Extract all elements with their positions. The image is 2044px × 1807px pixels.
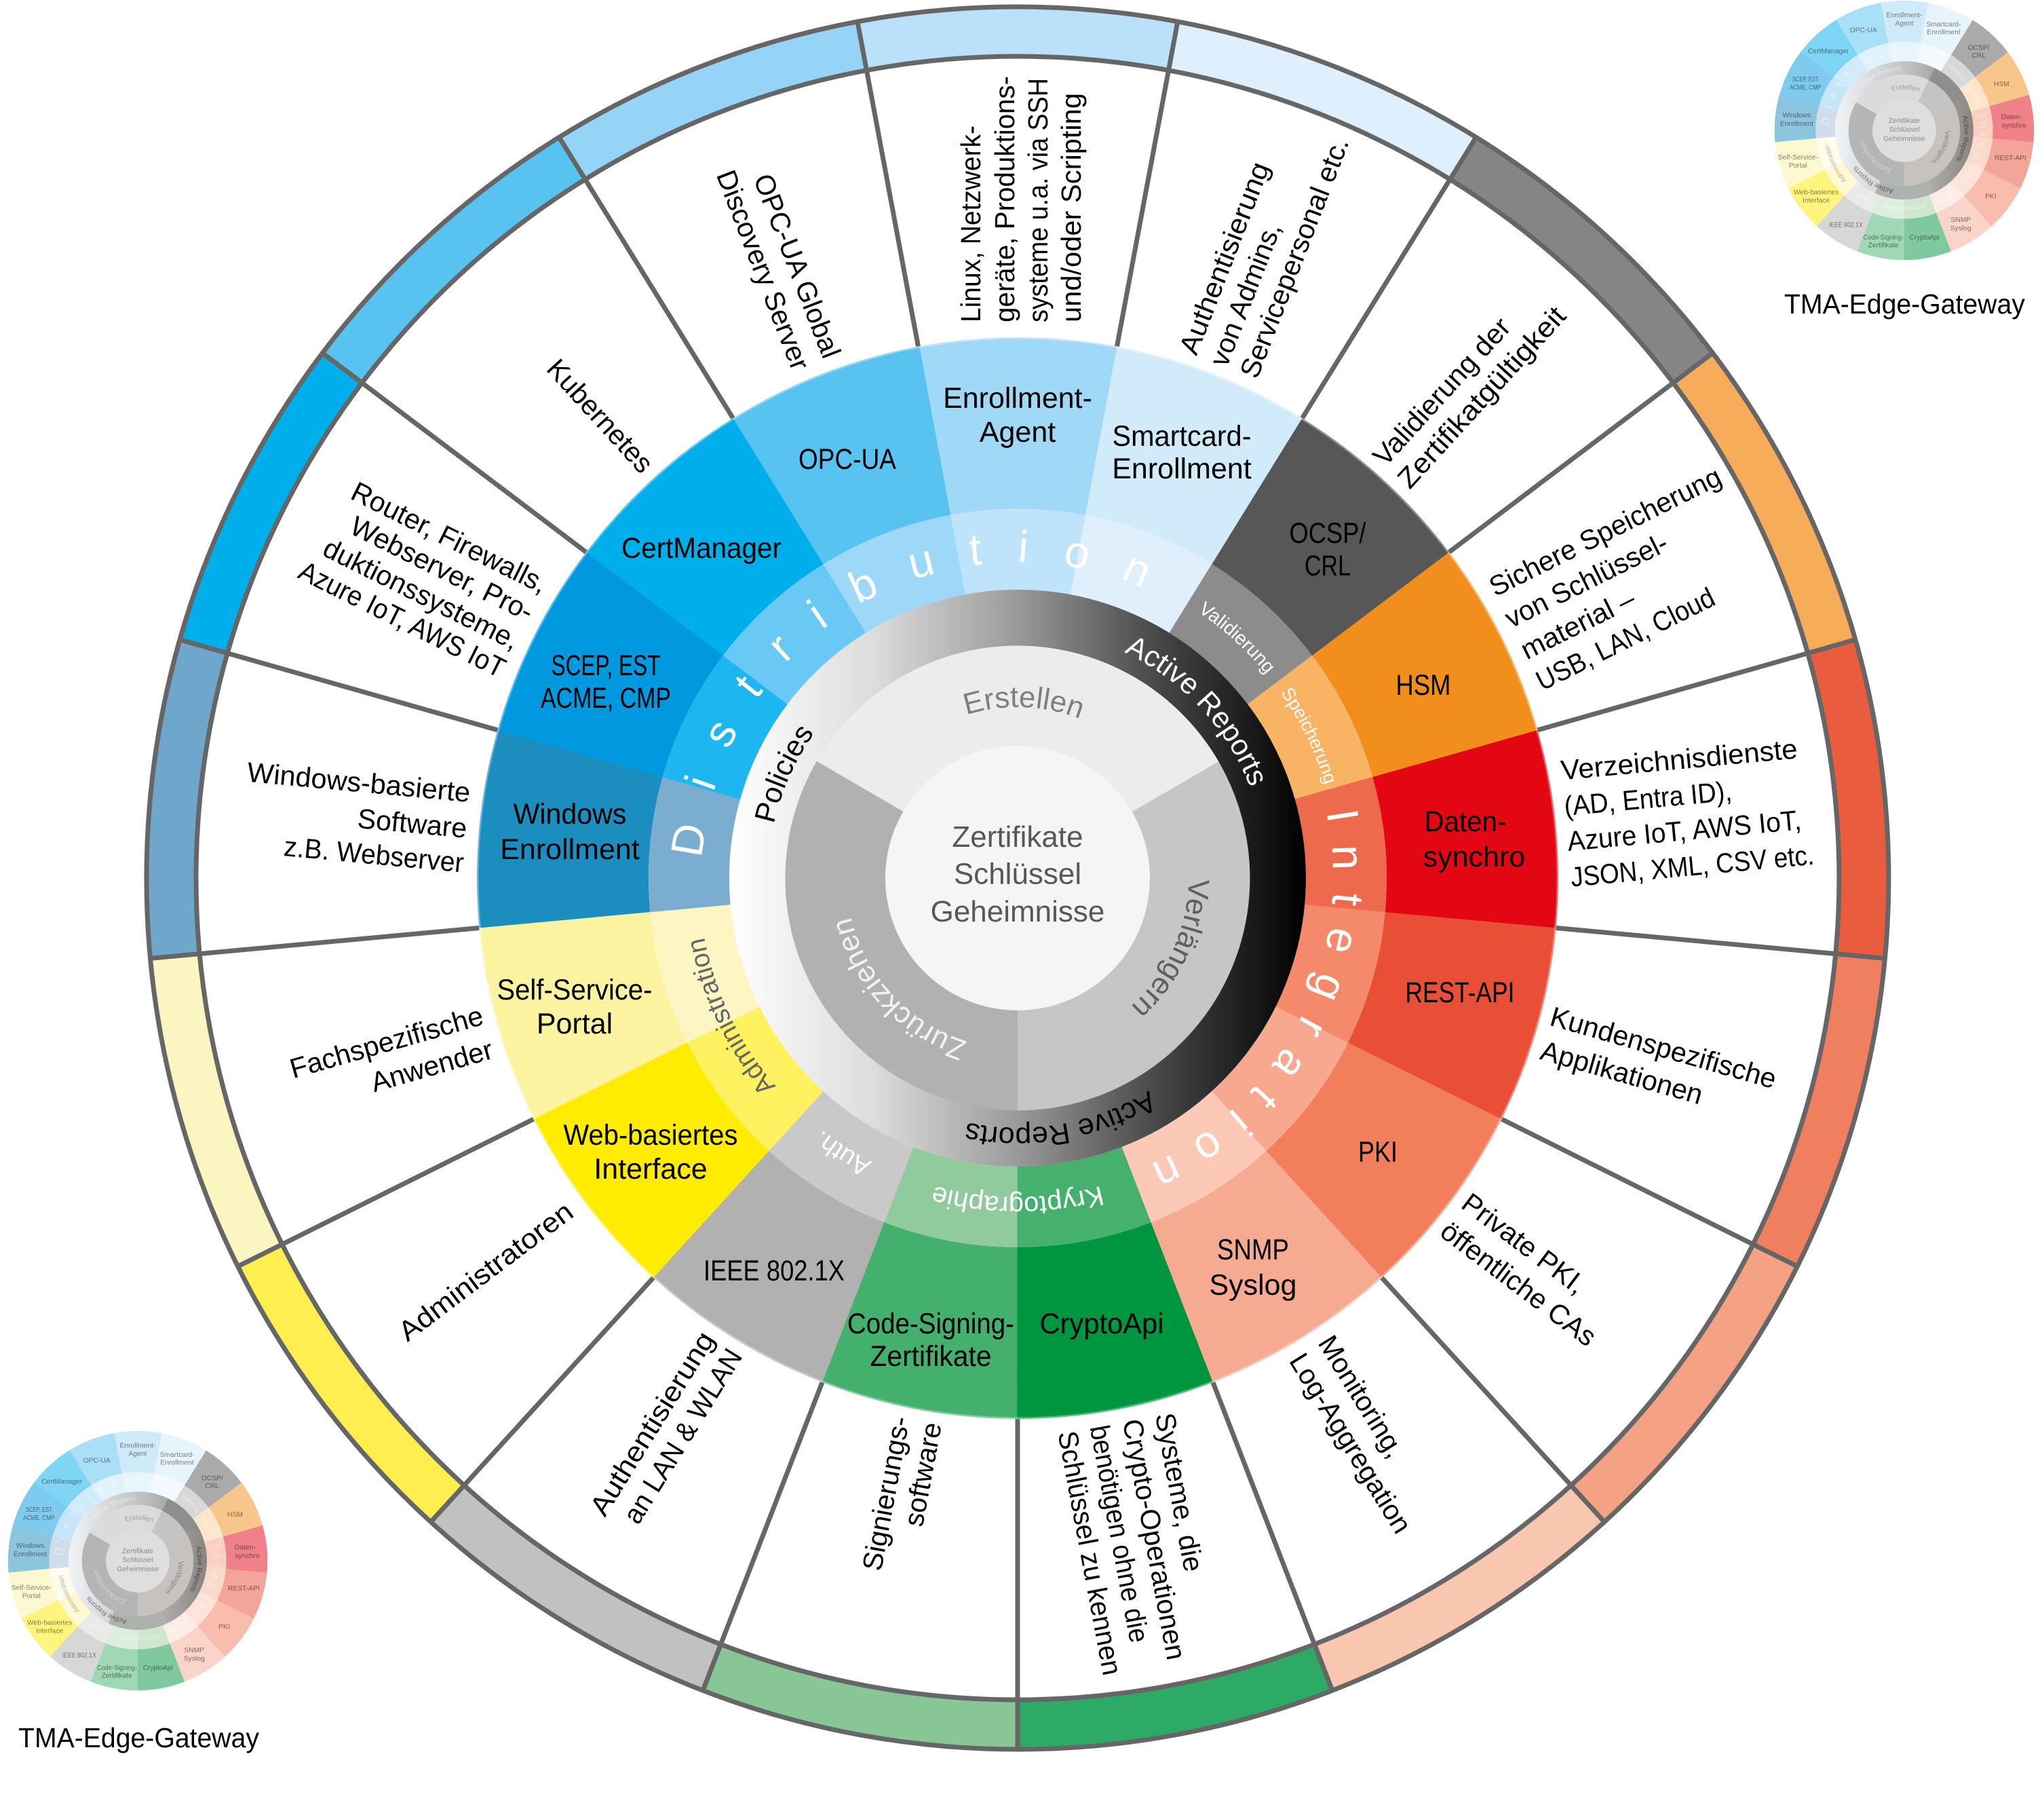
mini labels: Validierung: [182, 1494, 199, 1512]
description: Windows Enrollment: Software: [356, 803, 468, 844]
SNMP Syslog: Syslog: [1209, 1269, 1297, 1301]
mini labels: Active Reports: [1853, 166, 1894, 194]
mini labels: Active Reports: [87, 1596, 128, 1624]
centre text: Zertifikate: [952, 820, 1083, 854]
mini labels: Administration: [60, 1576, 80, 1612]
segment labels: [497, 382, 1525, 1373]
mini labels: Distribution: [1821, 47, 1919, 125]
mini labels: Active Reports: [1859, 66, 1902, 88]
SCEP, EST ACME, CMP: ACME, CMP: [541, 682, 671, 715]
mini labels: Interface: [36, 1627, 63, 1635]
ring: category band: [689, 550, 1346, 1206]
description: PKI: öffentliche CAs: [1435, 1215, 1602, 1352]
description: Windows Enrollment: z.B. Webserver: [283, 831, 465, 879]
mini labels: PKI: [218, 1623, 230, 1631]
SNMP Syslog: SNMP: [1217, 1234, 1289, 1266]
description: Datensynchro: Verzeichnisdienste: [1560, 733, 1798, 786]
description: SNMP: Monitoring,: [1312, 1330, 1411, 1463]
mini labels: SCEP, EST: [1792, 76, 1819, 83]
PKI: PKI: [1358, 1136, 1397, 1168]
ring: technology segments: [478, 338, 1558, 1418]
mini labels: SNMP: [1950, 216, 1971, 224]
description: SCEP: duktionssysteme,: [318, 532, 524, 656]
label: Validierung: Validierung: [1202, 601, 1274, 674]
Windows Enrollment: Windows: [513, 798, 627, 831]
Datensynchro: Daten-: [1425, 805, 1506, 838]
caption: bottom left mini wheel: TMA-Edge-Gateway: [18, 1722, 259, 1753]
mini labels: Distribution: [54, 1477, 153, 1555]
ring: lifecycle sectors: [836, 696, 1199, 1060]
CertManager: CertManager: [621, 532, 782, 565]
label: Policies: Policies: [754, 727, 813, 822]
description: SNMP: Log-Aggregation: [1284, 1348, 1418, 1539]
outer descriptions, left half: [239, 153, 948, 1579]
OCSP/CRL: CRL: [1305, 550, 1351, 582]
mini labels: CryptoApi: [1910, 234, 1940, 242]
mini labels: Administration: [1826, 145, 1847, 182]
description: SCEP: Azure IoT, AWS IoT: [294, 555, 511, 684]
mini labels: Enrollment-: [1887, 12, 1922, 20]
description: OCSP: Zertifikatgültigkeit: [1391, 300, 1573, 494]
mini labels: Enrollment-: [120, 1443, 155, 1450]
mini labels: HSM: [1994, 81, 2009, 88]
mini labels: Verlängern: [1932, 131, 1950, 163]
mini labels: Self-Service-: [1778, 154, 1818, 161]
mini labels: [1778, 12, 2026, 250]
mini labels: Enrollment: [14, 1551, 47, 1558]
mini labels: Smartcard-: [160, 1451, 195, 1459]
mini labels: [12, 1443, 260, 1680]
description: Datensynchro: Azure IoT, AWS IoT,: [1566, 804, 1802, 857]
mini labels: synchro: [2001, 122, 2026, 130]
SCEP, EST ACME, CMP: SCEP, EST: [551, 649, 661, 682]
mini labels: IEEE 802.1X: [62, 1652, 96, 1659]
caption: top right mini wheel: TMA-Edge-Gateway: [1784, 288, 2025, 320]
mini labels: Active Reports: [1956, 115, 1969, 161]
mini labels: Active Reports: [190, 1546, 203, 1592]
mini labels: Daten-: [235, 1544, 256, 1551]
mini labels: PKI: [1985, 193, 1997, 200]
mini labels: Interface: [1802, 197, 1830, 204]
Code-Signing-Zertifikate: Code-Signing-: [847, 1308, 1014, 1340]
outer descriptions, right half: [955, 76, 1815, 1677]
mini labels: Kryptographie: [117, 1635, 159, 1641]
Windows Enrollment: Enrollment: [500, 833, 640, 866]
mini labels: CertManager: [41, 1479, 83, 1486]
mini labels: Self-Service-: [12, 1584, 52, 1592]
mini labels: CRL: [205, 1483, 219, 1490]
description: Code-Signing: software: [898, 1420, 948, 1529]
mini labels: Web-basiertes: [27, 1619, 72, 1627]
mini labels: Integration: [1937, 114, 1987, 204]
mini labels: ACME, CMP: [23, 1515, 54, 1522]
description: Smartcard-Enrollment: Servicepersonal etc.: [1234, 133, 1355, 382]
Enrollment-Agent: Enrollment-: [943, 382, 1092, 415]
mini labels: IEEE 802.1X: [1829, 221, 1863, 229]
mini labels: Zertifikate: [122, 1547, 153, 1555]
mini labels: Code-Signing-: [97, 1665, 137, 1672]
ring: active reports gradient: [757, 617, 1278, 1139]
OCSP/CRL: OCSP/: [1289, 517, 1366, 550]
mini labels: Auth.: [91, 1622, 102, 1631]
mini wheel: bottom left: [12, 1443, 260, 1680]
Web-basiertes Interface: Interface: [594, 1153, 708, 1185]
mini labels: Active Reports: [93, 1497, 135, 1519]
Enrollment-Agent: Agent: [980, 416, 1056, 449]
mini labels: Verlängern: [162, 1558, 189, 1598]
description: REST-API: Kundenspezifische: [1547, 1001, 1780, 1095]
description: CryptoApi: Schlüssel zu kennen: [1052, 1428, 1128, 1677]
description: CryptoApi: Systeme, die: [1149, 1410, 1210, 1574]
description: OPC-UA: OPC-UA Global: [748, 170, 847, 362]
description: Enrollment-Agent: Linux, Netzwerk-: [955, 126, 986, 322]
description: REST-API: Applikationen: [1537, 1035, 1706, 1110]
label: Integration: Integration: [1153, 812, 1362, 1183]
centre circle: [885, 746, 1150, 1010]
label: Auth.: Auth.: [822, 1131, 872, 1174]
description: IEEE: Authentisierung: [583, 1326, 720, 1521]
description: Enrollment-Agent: systeme u.a. via SSH: [1022, 78, 1054, 322]
description: Self-Service: Anwender: [367, 1033, 497, 1098]
description: SCEP: Webserver, Pro-: [345, 510, 539, 627]
description: Windows Enrollment: Windows-basierte: [246, 757, 471, 808]
Datensynchro: synchro: [1423, 841, 1525, 873]
mini labels: ACME, CMP: [1790, 84, 1821, 92]
mini labels: SCEP, EST: [26, 1506, 52, 1514]
mini labels: Windows: [16, 1542, 45, 1550]
ring: outer colour band: [171, 31, 1864, 1725]
description: Enrollment-Agent: und/oder Scripting: [1056, 93, 1087, 322]
Smartcard-Enrollment: Enrollment: [1112, 453, 1252, 485]
description: Smartcard-Enrollment: von Admins,: [1203, 218, 1287, 370]
mini labels: Schlüssel: [122, 1556, 153, 1564]
label: Kryptographie: Kryptographie: [933, 1186, 1103, 1213]
description: IEEE: an LAN & WLAN: [617, 1343, 748, 1529]
OPC-UA: OPC-UA: [798, 443, 896, 476]
mini labels: Geheimnisse: [1883, 134, 1925, 142]
CryptoApi: CryptoApi: [1039, 1308, 1164, 1340]
mini labels: Zertifikate: [1889, 117, 1920, 125]
mini labels: OPC-UA: [83, 1457, 111, 1464]
mini labels: Syslog: [184, 1655, 205, 1662]
mini labels: Zurückziehen: [1861, 140, 1892, 174]
description: HSM: material –: [1516, 582, 1640, 666]
description: Enrollment-Agent: geräte, Produktions-: [989, 76, 1020, 322]
mini labels: Schlüssel: [1889, 126, 1920, 134]
Web-basiertes Interface: Web-basiertes: [563, 1119, 738, 1152]
centre text: Geheimnisse: [931, 895, 1104, 928]
centre text: Schlüssel: [954, 858, 1081, 890]
mini labels: Enrollment: [1927, 29, 1961, 37]
Self-Service-Portal: Self-Service-: [497, 974, 653, 1006]
IEEE 802.1X: IEEE 802.1X: [703, 1255, 845, 1287]
mini labels: Portal: [22, 1593, 41, 1600]
mini labels: Syslog: [1950, 225, 1971, 232]
mini labels: HSM: [227, 1511, 243, 1519]
mini segments: [1795, 21, 2013, 240]
mini labels: Auth.: [1857, 191, 1869, 201]
mini labels: REST-API: [1994, 155, 2026, 162]
mini wheel: top right: [1778, 12, 2026, 250]
mini labels: Windows: [1783, 112, 1811, 119]
label: Verlängern: Verlängern: [1132, 880, 1210, 1015]
mini labels: Speicherung: [201, 1515, 214, 1538]
mini labels: Geheimnisse: [117, 1565, 159, 1573]
description: Self-Service: Fachspezifische: [286, 1000, 486, 1084]
mini labels: Integration: [170, 1544, 220, 1634]
description: HSM: USB, LAN, Cloud: [1531, 582, 1720, 697]
mini labels: Smartcard-: [1927, 21, 1961, 28]
label: Active Reports bottom: Active Reports: [966, 1090, 1152, 1145]
label: Active Reports top: Active Reports: [1124, 638, 1263, 786]
mini labels: Speicherung: [1967, 85, 1980, 108]
mini labels: Erstellen: [1891, 84, 1920, 92]
mini labels: Portal: [1789, 162, 1807, 170]
description: CertManager: Kubernetes: [541, 353, 659, 479]
mini segments: [28, 1451, 247, 1670]
mini labels: Web-basiertes: [1794, 189, 1838, 196]
mini labels: OCSP/: [1968, 44, 1990, 52]
mini labels: CRL: [1971, 52, 1986, 60]
description: CryptoApi: benötigen ohne die: [1084, 1422, 1155, 1645]
mini labels: OCSP/: [201, 1475, 223, 1482]
mini labels: CryptoApi: [143, 1665, 173, 1672]
description: Datensynchro: JSON, XML, CSV etc.: [1569, 839, 1815, 893]
mini labels: Zertifikate: [102, 1673, 132, 1680]
mini labels: Agent: [129, 1451, 147, 1458]
mini labels: Zurückziehen: [88, 1567, 129, 1610]
mini labels: Enrollment: [160, 1460, 194, 1467]
mini labels: Kryptographie: [1884, 204, 1925, 210]
label: Erstellen: Erstellen: [963, 687, 1083, 718]
mini labels: REST-API: [228, 1585, 260, 1593]
description: Datensynchro: (AD, Entra ID),: [1563, 776, 1733, 822]
description: Web-Interface: Administratoren: [392, 1196, 579, 1347]
description: Smartcard-Enrollment: Authentisierung: [1173, 157, 1275, 359]
label: Administration: Administration: [691, 938, 776, 1092]
mini labels: synchro: [235, 1553, 260, 1560]
mini labels: Daten-: [2001, 113, 2022, 121]
Self-Service-Portal: Portal: [537, 1008, 613, 1040]
mini labels: Zertifikate: [1868, 242, 1899, 250]
description: CryptoApi: Crypto-Operationen: [1117, 1416, 1192, 1662]
mini labels: Erstellen: [123, 1513, 155, 1525]
description: SCEP: Router, Firewalls,: [347, 476, 553, 599]
label: Speicherung: Speicherung: [1282, 688, 1334, 784]
mini labels: SNMP: [184, 1647, 204, 1654]
mini labels: Enrollment: [1780, 120, 1813, 128]
description: HSM: von Schlüssel-: [1500, 527, 1673, 634]
Code-Signing-Zertifikate: Zertifikate: [870, 1340, 992, 1373]
description: OPC-UA: Discovery Server: [710, 166, 816, 375]
description: Code-Signing: Signierungs-: [856, 1414, 916, 1573]
description: PKI: Private PKI,: [1456, 1187, 1592, 1300]
HSM: HSM: [1396, 669, 1450, 702]
Smartcard-Enrollment: Smartcard-: [1113, 420, 1251, 453]
mini labels: Agent: [1895, 20, 1914, 28]
mini labels: Validierung: [1948, 64, 1966, 81]
mini labels: CertManager: [1808, 48, 1849, 56]
description: OCSP: Validierung der: [1366, 311, 1517, 472]
mini labels: Code-Signing-: [1864, 234, 1904, 242]
mini labels: OPC-UA: [1850, 26, 1877, 34]
description: HSM: Sichere Speicherung: [1484, 461, 1727, 603]
REST-API: REST-API: [1406, 976, 1514, 1009]
label: Distribution: Distribution: [671, 529, 1148, 855]
label: Zurückziehen: Zurückziehen: [837, 918, 967, 1061]
